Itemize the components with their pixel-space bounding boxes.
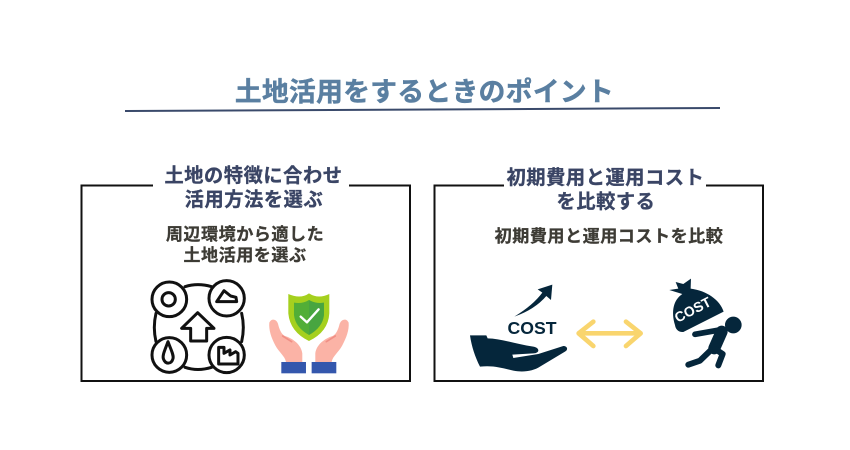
arrow: double-headed comparison [579,322,641,346]
panel heading: cost comparison [507,167,704,213]
panel: land use [82,165,410,381]
panel heading: cost comparison: を比較する [557,191,655,213]
panel frame: cost comparison [434,186,763,381]
panel heading: land use [164,165,343,211]
icon: person carrying cost bag [669,279,742,365]
icon: shield and hands [269,293,349,373]
panel text: land use [166,225,324,265]
panel heading: land use: 土地の特徴に合わせ [164,165,343,187]
panel text: land use: 土地活用を選ぶ [183,246,307,265]
icon: hand with rising cost: COST [507,318,557,338]
panel text: cost comparison: 初期費用と運用コストを比較 [495,227,723,246]
panel frame: land use [82,186,410,381]
title underline [125,108,720,111]
icon: hand with rising cost [470,285,567,371]
panel text: land use: 周辺環境から適した [166,225,324,244]
title: 土地活用をするときのポイント [235,77,614,107]
panel heading: cost comparison: 初期費用と運用コスト [507,167,704,189]
icon: land resources [152,281,244,373]
panel heading: land use: 活用方法を選ぶ [185,188,323,211]
panel: cost comparison [434,167,763,381]
icon: person carrying cost bag: COST [672,293,714,325]
